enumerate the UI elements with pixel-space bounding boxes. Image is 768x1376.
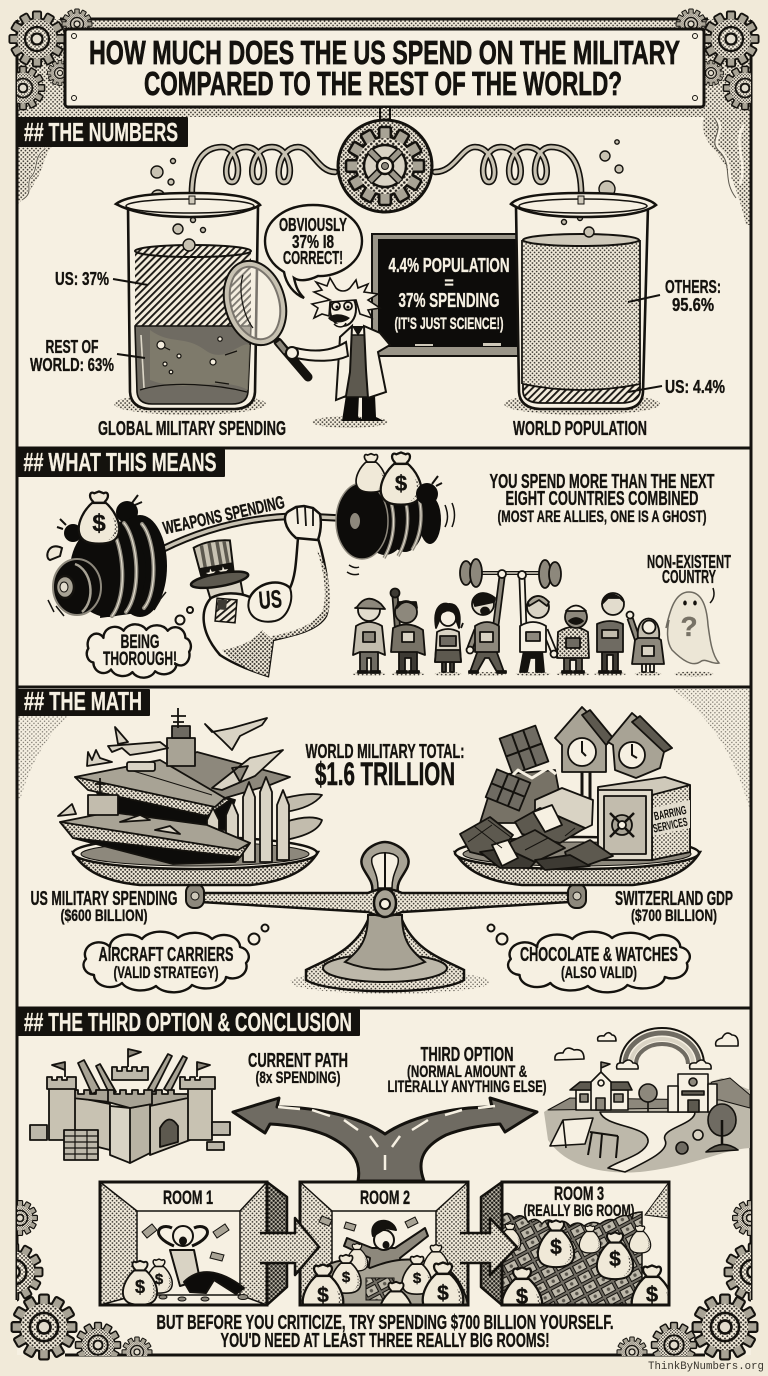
source credit: ThinkByNumbers.org bbox=[648, 1361, 764, 1373]
speech bubble: obviously 37% is correct: CORRECT! bbox=[283, 248, 343, 268]
label: current path bbox=[248, 1050, 348, 1087]
thought cloud: chocolate and watches: (ALSO VALID) bbox=[561, 963, 637, 982]
room 3: (REALLY BIG ROOM) bbox=[524, 1201, 634, 1220]
decorative gears: top corners bbox=[1, 9, 767, 110]
ship island and mast bbox=[167, 708, 195, 766]
cuckoo clock 1 bbox=[555, 707, 613, 800]
goods pile: chocolate, watches, banking bbox=[460, 707, 690, 870]
person 1 bbox=[352, 599, 386, 676]
label: non-existent country bbox=[647, 552, 731, 603]
label: others 95.6%: 95.6% bbox=[672, 295, 714, 315]
person 8 bbox=[626, 612, 664, 676]
caption: global military spending: GLOBAL MILITARY SPENDING bbox=[98, 418, 286, 440]
top hat bbox=[184, 536, 249, 591]
towers bbox=[49, 1086, 75, 1140]
safe with banking services bbox=[598, 777, 690, 860]
large money bags: $ bbox=[516, 1284, 528, 1309]
thought cloud: being thorough: THOROUGH! bbox=[103, 649, 177, 670]
person 2 bbox=[390, 588, 425, 676]
section heading: third option and conclusion bbox=[16, 1007, 360, 1037]
beaker: global military spending bbox=[114, 158, 266, 415]
top hat: ★ ★ bbox=[205, 565, 230, 581]
money bags: right plate: $ bbox=[395, 471, 407, 496]
text: world military total: $1.6 TRILLION bbox=[315, 756, 455, 792]
bombs: left plate bbox=[47, 495, 142, 560]
large money bags: $ bbox=[550, 1236, 562, 1259]
tent and swing bbox=[550, 1118, 703, 1158]
speech bubble: obviously 37% is correct bbox=[265, 205, 362, 298]
rainbow bbox=[620, 1028, 704, 1064]
text: world military total bbox=[306, 741, 464, 792]
light box bbox=[535, 788, 593, 838]
arrow: room 1 to room 2 bbox=[260, 1218, 319, 1275]
heap of money bags: room 2: $ bbox=[317, 1284, 329, 1307]
barbell: weapons spending bbox=[47, 452, 455, 618]
right pan bbox=[455, 837, 700, 885]
walls bbox=[70, 1096, 110, 1150]
thought cloud: chocolate and watches bbox=[488, 924, 690, 992]
label: third option: THIRD OPTION bbox=[420, 1044, 514, 1066]
label: switzerland GDP: ($700 BILLION) bbox=[631, 906, 717, 925]
label: third option bbox=[388, 1044, 546, 1096]
room 3: ROOM 3 bbox=[554, 1184, 604, 1205]
side missiles bbox=[285, 794, 322, 840]
label: third option: (NORMAL AMOUNT & bbox=[407, 1062, 527, 1081]
room 1: ROOM 1 bbox=[163, 1188, 213, 1209]
money bags: room 1 bbox=[123, 1259, 172, 1305]
cuckoo clock 2 bbox=[608, 713, 672, 778]
person 6 bbox=[556, 606, 590, 676]
hills and ground bbox=[544, 1078, 750, 1173]
label: third option: LITERALLY ANYTHING ELSE) bbox=[388, 1077, 546, 1096]
forked road arrows bbox=[233, 1098, 537, 1181]
clouds bbox=[555, 1033, 738, 1069]
lower carrier bbox=[58, 778, 250, 864]
military pile: carriers, jets and missiles bbox=[58, 708, 322, 864]
divider lines bbox=[17, 448, 751, 1008]
excited person bbox=[343, 1220, 429, 1267]
heap of money bags: room 2: $ bbox=[437, 1282, 449, 1305]
thought cloud: aircraft carriers bbox=[84, 924, 268, 992]
ghost: ? bbox=[680, 611, 698, 642]
jets bbox=[87, 718, 283, 790]
beaker: world population bbox=[504, 140, 660, 415]
heap of money bags: room 2 bbox=[302, 1243, 466, 1304]
section heading: the numbers: ## THE NUMBERS bbox=[24, 117, 178, 147]
blackboard: 4.4% POPULATION bbox=[388, 255, 510, 277]
small barbell bbox=[460, 559, 561, 588]
money bag: left plate bbox=[79, 491, 119, 544]
balance scale bbox=[73, 837, 700, 994]
magnifying glass bbox=[218, 257, 308, 377]
panel: third option and conclusion bbox=[16, 1007, 750, 1352]
section heading: third option and conclusion: ## THE THIRD OPTION & CONCLUSION bbox=[24, 1007, 352, 1037]
arrow: room 2 to room 3 bbox=[460, 1218, 517, 1275]
room 1 bbox=[100, 1182, 287, 1305]
label: US military spending: US MILITARY SPENDING bbox=[30, 888, 178, 910]
label: US military spending: ($600 BILLION) bbox=[60, 906, 148, 925]
overwhelmed person bbox=[159, 1226, 244, 1294]
text: next eight countries bbox=[490, 471, 714, 526]
label: rest of world 63%: REST OF bbox=[46, 337, 98, 357]
large money bags bbox=[504, 1219, 668, 1304]
thought cloud: being thorough: BEING bbox=[120, 632, 160, 653]
upper carrier hull and shadow bbox=[75, 752, 290, 830]
central gear bbox=[338, 107, 432, 212]
conclusion text bbox=[156, 1312, 614, 1352]
blackboard bbox=[372, 234, 522, 356]
ghost bbox=[666, 592, 719, 676]
label: rest of world 63% bbox=[30, 337, 145, 375]
curved label: weapons spending: WEAPONS SPENDING bbox=[161, 492, 286, 538]
wrapper bbox=[480, 770, 565, 823]
large money bags: $ bbox=[646, 1282, 658, 1307]
title plaque bbox=[65, 29, 704, 107]
label: switzerland GDP bbox=[615, 888, 733, 925]
school bbox=[570, 1062, 632, 1110]
beam bbox=[200, 889, 570, 916]
panel: the math bbox=[16, 686, 750, 994]
stacks of cash bbox=[64, 1130, 98, 1160]
person 7 bbox=[594, 593, 626, 676]
person 3 bbox=[434, 603, 463, 676]
label: US 4.4% bbox=[628, 377, 725, 397]
fist bbox=[285, 506, 321, 540]
scientist bbox=[296, 278, 390, 428]
room 2 bbox=[298, 1180, 470, 1306]
loose bills: room 2 bbox=[319, 1216, 418, 1231]
scale base bbox=[306, 920, 464, 991]
thought cloud: aircraft carriers: AIRCRAFT CARRIERS bbox=[98, 944, 234, 966]
chocolate stack bbox=[460, 808, 613, 870]
text: world military total: WORLD MILITARY TOTAL: bbox=[306, 741, 464, 763]
left weight plates bbox=[48, 515, 167, 618]
safe with banking services: BARRING bbox=[653, 803, 688, 823]
label: current path: (8x SPENDING) bbox=[256, 1068, 340, 1087]
caption: world population: WORLD POPULATION bbox=[513, 418, 647, 440]
label: others 95.6%: OTHERS: bbox=[665, 277, 721, 297]
wrapper foil bbox=[498, 768, 556, 780]
panel: the numbers bbox=[16, 107, 725, 440]
section heading: the numbers bbox=[16, 117, 188, 147]
section vignette bbox=[18, 689, 750, 810]
coins bbox=[159, 1294, 248, 1301]
tubes and coils bbox=[192, 147, 581, 202]
person 4 bbox=[466, 570, 506, 676]
fortress: current path bbox=[30, 1049, 230, 1163]
money pile bbox=[502, 1212, 642, 1305]
safe with banking services: SERVICES bbox=[652, 815, 689, 836]
section heading: the math: ## THE MATH bbox=[24, 686, 142, 716]
label: current path: CURRENT PATH bbox=[248, 1050, 348, 1072]
hospital bbox=[668, 1074, 717, 1112]
panel: what this means bbox=[16, 447, 731, 678]
bar bbox=[163, 516, 358, 549]
money bag: left plate: $ bbox=[92, 510, 106, 537]
label: US 37%: US: 37% bbox=[55, 269, 109, 289]
thought cloud: being thorough bbox=[87, 607, 193, 678]
conclusion text: YOU'D NEED AT LEAST THREE REALLY BIG ROOMS! bbox=[220, 1330, 550, 1352]
room 3 bbox=[481, 1182, 672, 1320]
weapons behind walls bbox=[78, 1054, 187, 1095]
section heading: what this means: ## WHAT THIS MEANS bbox=[24, 447, 216, 477]
blackboard: 37% SPENDING bbox=[398, 290, 500, 312]
left pan bbox=[73, 837, 318, 885]
dial bbox=[361, 842, 409, 892]
right weight plates bbox=[336, 480, 454, 575]
large money bags: $ bbox=[609, 1248, 621, 1271]
uncle sam bbox=[184, 506, 330, 676]
money bags: right plate bbox=[356, 452, 442, 505]
thought cloud: aircraft carriers: (VALID STRATEGY) bbox=[114, 963, 218, 982]
label: others 95.6% bbox=[628, 277, 721, 315]
chocolate bar: top bbox=[500, 726, 548, 774]
label: rest of world 63%: WORLD: 63% bbox=[30, 355, 114, 375]
label: US 4.4%: US: 4.4% bbox=[665, 377, 725, 397]
loose bills: room 1 bbox=[142, 1224, 229, 1261]
speech bubble: obviously 37% is correct: OBVIOUSLY bbox=[279, 215, 347, 235]
blackboard: (IT'S JUST SCIENCE!) bbox=[394, 314, 504, 333]
heap of money bags: room 2: $ bbox=[413, 1270, 422, 1287]
room 2: ROOM 2 bbox=[360, 1188, 410, 1209]
eight small countries bbox=[352, 570, 664, 676]
label: US military spending bbox=[30, 888, 178, 925]
flag patch bbox=[215, 598, 237, 623]
person 5 bbox=[515, 571, 558, 676]
speech bubble: obviously 37% is correct: 37% I8 bbox=[292, 232, 334, 252]
thought cloud: chocolate and watches: CHOCOLATE & WATCHES bbox=[520, 944, 678, 966]
missiles bbox=[207, 777, 289, 862]
label: non-existent country: COUNTRY bbox=[662, 567, 716, 587]
chocolate bar: middle bbox=[486, 769, 530, 811]
town: third option bbox=[544, 1028, 750, 1173]
winding path bbox=[600, 1112, 695, 1172]
money bags: room 1: $ bbox=[135, 1277, 145, 1297]
heap of money bags: room 2: $ bbox=[342, 1269, 351, 1286]
blackboard: = bbox=[444, 275, 454, 292]
trees bbox=[639, 1084, 738, 1152]
uncle sam: US bbox=[258, 585, 283, 615]
decorative gears: bottom corners bbox=[0, 1201, 768, 1368]
money bags: room 1: $ bbox=[155, 1271, 164, 1288]
